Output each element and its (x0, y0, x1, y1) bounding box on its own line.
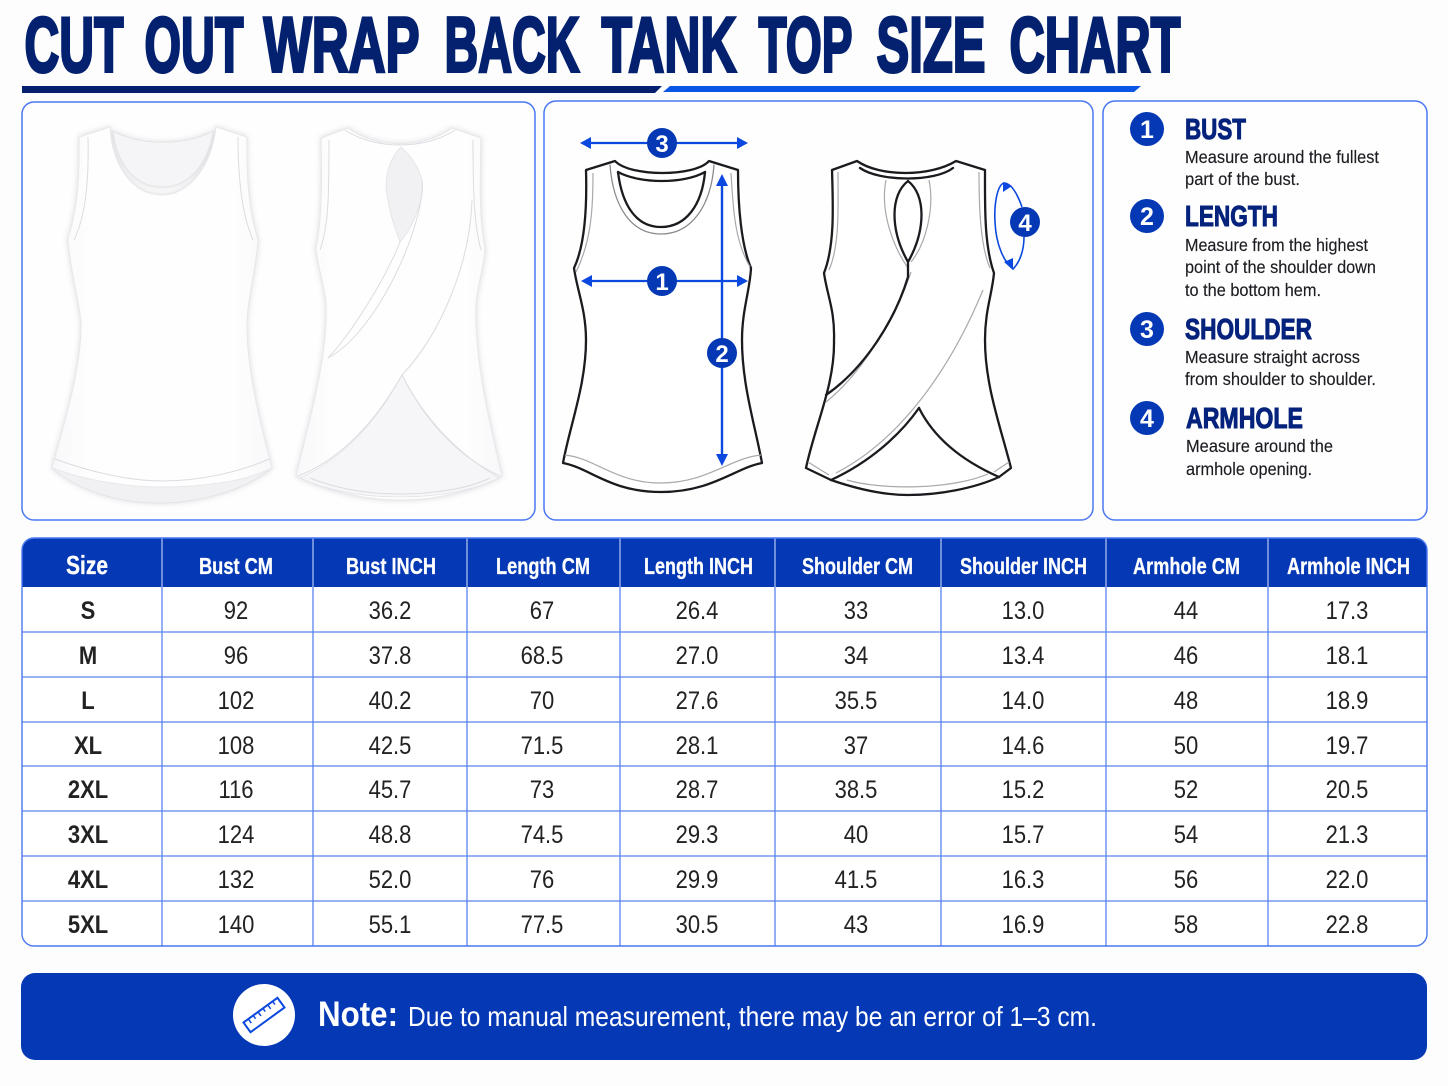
title: TOP (758, 0, 852, 88)
column: shoulder inch: 13.0 (1002, 597, 1044, 624)
item: armhole: ARMHOLE (1186, 403, 1303, 435)
column: length cm: 74.5 (521, 821, 563, 848)
column: shoulder cm (835, 597, 877, 938)
item: length (1130, 199, 1376, 300)
column: size: S (81, 597, 95, 624)
column: armhole inch: 22.8 (1326, 911, 1368, 938)
column: armhole cm: 44 (1174, 597, 1198, 624)
title: BACK (444, 0, 580, 88)
column: armhole inch: 20.5 (1326, 776, 1368, 803)
title: CUT (24, 0, 124, 88)
title: WRAP (264, 0, 420, 88)
size table (22, 538, 1427, 946)
column: bust inch: 42.5 (369, 732, 411, 759)
photo: front of tank top (52, 127, 272, 503)
column: size: XL (74, 732, 102, 759)
column: size (68, 597, 108, 938)
icon: ruler (233, 984, 295, 1046)
column: shoulder inch: 14.6 (1002, 732, 1044, 759)
measure: bust arrow 1 (581, 266, 748, 296)
column: bust inch: 45.7 (369, 776, 411, 803)
column: shoulder inch: 15.7 (1002, 821, 1044, 848)
column: bust cm: 116 (218, 776, 254, 803)
item: bust: part of the bust. (1185, 169, 1300, 189)
column: shoulder inch: 16.3 (1002, 866, 1044, 893)
column: length inch: 27.0 (676, 642, 718, 669)
column: armhole cm: 56 (1174, 866, 1198, 893)
column: armhole cm (1174, 597, 1198, 938)
item: shoulder (1130, 312, 1376, 389)
column: armhole inch: 17.3 (1326, 597, 1368, 624)
table header: Bust INCH (346, 553, 436, 579)
title: CHART (1010, 0, 1180, 88)
table header: Shoulder CM (802, 553, 913, 579)
column: bust cm: 96 (224, 642, 248, 669)
column: size: 2XL (68, 776, 108, 803)
item: length: 2 (1140, 203, 1154, 231)
column: bust cm: 140 (218, 911, 254, 938)
column: armhole cm: 46 (1174, 642, 1198, 669)
column: shoulder cm: 38.5 (835, 776, 877, 803)
column: bust inch: 48.8 (369, 821, 411, 848)
flat sketch: back (806, 161, 1011, 495)
item: length: point of the shoulder down (1185, 257, 1376, 277)
column: length cm: 73 (530, 776, 554, 803)
column: bust inch: 36.2 (369, 597, 411, 624)
item: shoulder: 3 (1140, 316, 1154, 344)
column: shoulder cm: 40 (844, 821, 868, 848)
photo: back of tank top (296, 128, 502, 500)
column: shoulder inch (1002, 597, 1044, 938)
item: shoulder: Measure straight across (1185, 347, 1360, 367)
column: shoulder cm: 33 (844, 597, 868, 624)
column: size: 4XL (68, 866, 108, 893)
column: bust cm: 124 (218, 821, 254, 848)
column: length cm: 76 (530, 866, 554, 893)
item: length: to the bottom hem. (1185, 280, 1321, 300)
item: length: LENGTH (1185, 201, 1278, 233)
column: armhole cm: 54 (1174, 821, 1198, 848)
column: length inch: 28.7 (676, 776, 718, 803)
item: shoulder: SHOULDER (1185, 314, 1312, 346)
column: bust cm: 108 (218, 732, 254, 759)
column: armhole inch (1326, 597, 1368, 938)
column: size: L (81, 687, 95, 714)
measure: shoulder arrow 3: 3 (655, 131, 669, 158)
column: bust inch: 37.8 (369, 642, 411, 669)
panel: product photos (22, 102, 535, 520)
column: armhole inch: 21.3 (1326, 821, 1368, 848)
lower opening (300, 375, 499, 497)
column: length cm (521, 597, 563, 938)
table header: Armhole INCH (1287, 553, 1410, 579)
column: length inch: 29.3 (676, 821, 718, 848)
column: bust inch: 40.2 (369, 687, 411, 714)
keyhole (386, 147, 423, 242)
column: length cm: 67 (530, 597, 554, 624)
note text (318, 995, 1097, 1034)
table header: Length CM (496, 553, 590, 579)
note text: Note: (318, 995, 398, 1034)
column: bust inch: 52.0 (369, 866, 411, 893)
column: length cm: 70 (530, 687, 554, 714)
item: bust: 1 (1140, 116, 1154, 144)
column: length cm: 68.5 (521, 642, 563, 669)
item: bust: Measure around the fullest (1185, 147, 1379, 167)
column: bust cm: 132 (218, 866, 254, 893)
measure: bust arrow 1: 1 (655, 269, 669, 296)
measure: length arrow 2: 2 (715, 341, 729, 368)
item: shoulder: from shoulder to shoulder. (1185, 369, 1376, 389)
column: shoulder cm: 41.5 (835, 866, 877, 893)
column: bust inch: 55.1 (369, 911, 411, 938)
column: shoulder inch: 15.2 (1002, 776, 1044, 803)
column: shoulder cm: 37 (844, 732, 868, 759)
column: size: 3XL (68, 821, 108, 848)
item: armhole: Measure around the (1186, 436, 1333, 456)
column: shoulder cm: 43 (844, 911, 868, 938)
table header (66, 550, 1410, 580)
item: armhole: armhole opening. (1186, 459, 1312, 479)
measure: length arrow 2 (707, 174, 737, 466)
column: armhole cm: 58 (1174, 911, 1198, 938)
table header: Length INCH (644, 553, 753, 579)
column: bust cm: 102 (218, 687, 254, 714)
note text: Due to manual measurement, there may be an error of 1–3 cm. (408, 1001, 1097, 1032)
column: bust inch (369, 597, 411, 938)
note banner (21, 973, 1427, 1060)
flat sketch: front (563, 161, 762, 492)
measure: shoulder arrow 3 (580, 128, 748, 158)
item: armhole (1130, 401, 1333, 479)
column: bust cm: 92 (224, 597, 248, 624)
column: size: 5XL (68, 911, 108, 938)
column: length cm: 77.5 (521, 911, 563, 938)
panel: how to measure (1103, 101, 1427, 520)
title underline (22, 86, 1141, 93)
table header: Size (66, 550, 108, 580)
table header: Bust CM (199, 553, 273, 579)
column: armhole cm: 50 (1174, 732, 1198, 759)
measure: armhole arrow 4: 4 (1018, 210, 1032, 237)
column: shoulder cm: 34 (844, 642, 868, 669)
column: length inch (676, 597, 718, 938)
column: length cm: 71.5 (521, 732, 563, 759)
column: armhole inch: 18.9 (1326, 687, 1368, 714)
title: TANK (602, 0, 736, 88)
title (24, 0, 1180, 88)
neck opening (113, 131, 213, 187)
item: bust (1130, 112, 1379, 189)
title: SIZE (876, 0, 986, 88)
title: OUT (144, 0, 244, 88)
column: shoulder inch: 13.4 (1002, 642, 1044, 669)
column: length inch: 26.4 (676, 597, 718, 624)
column: armhole cm: 48 (1174, 687, 1198, 714)
panel: measurement diagram (544, 101, 1093, 520)
column: armhole inch: 19.7 (1326, 732, 1368, 759)
column: armhole cm: 52 (1174, 776, 1198, 803)
column: bust cm (218, 597, 254, 938)
item: bust: BUST (1185, 114, 1246, 146)
measure: armhole arrow 4 (995, 182, 1040, 270)
column: armhole inch: 22.0 (1326, 866, 1368, 893)
column: shoulder cm: 35.5 (835, 687, 877, 714)
column: shoulder inch: 14.0 (1002, 687, 1044, 714)
column: length inch: 27.6 (676, 687, 718, 714)
column: shoulder inch: 16.9 (1002, 911, 1044, 938)
column: length inch: 30.5 (676, 911, 718, 938)
column: length inch: 29.9 (676, 866, 718, 893)
item: armhole: 4 (1140, 405, 1154, 433)
column: length inch: 28.1 (676, 732, 718, 759)
column: size: M (79, 642, 97, 669)
column: armhole inch: 18.1 (1326, 642, 1368, 669)
item: length: Measure from the highest (1185, 235, 1368, 255)
table header: Armhole CM (1133, 553, 1240, 579)
table header: Shoulder INCH (960, 553, 1087, 579)
